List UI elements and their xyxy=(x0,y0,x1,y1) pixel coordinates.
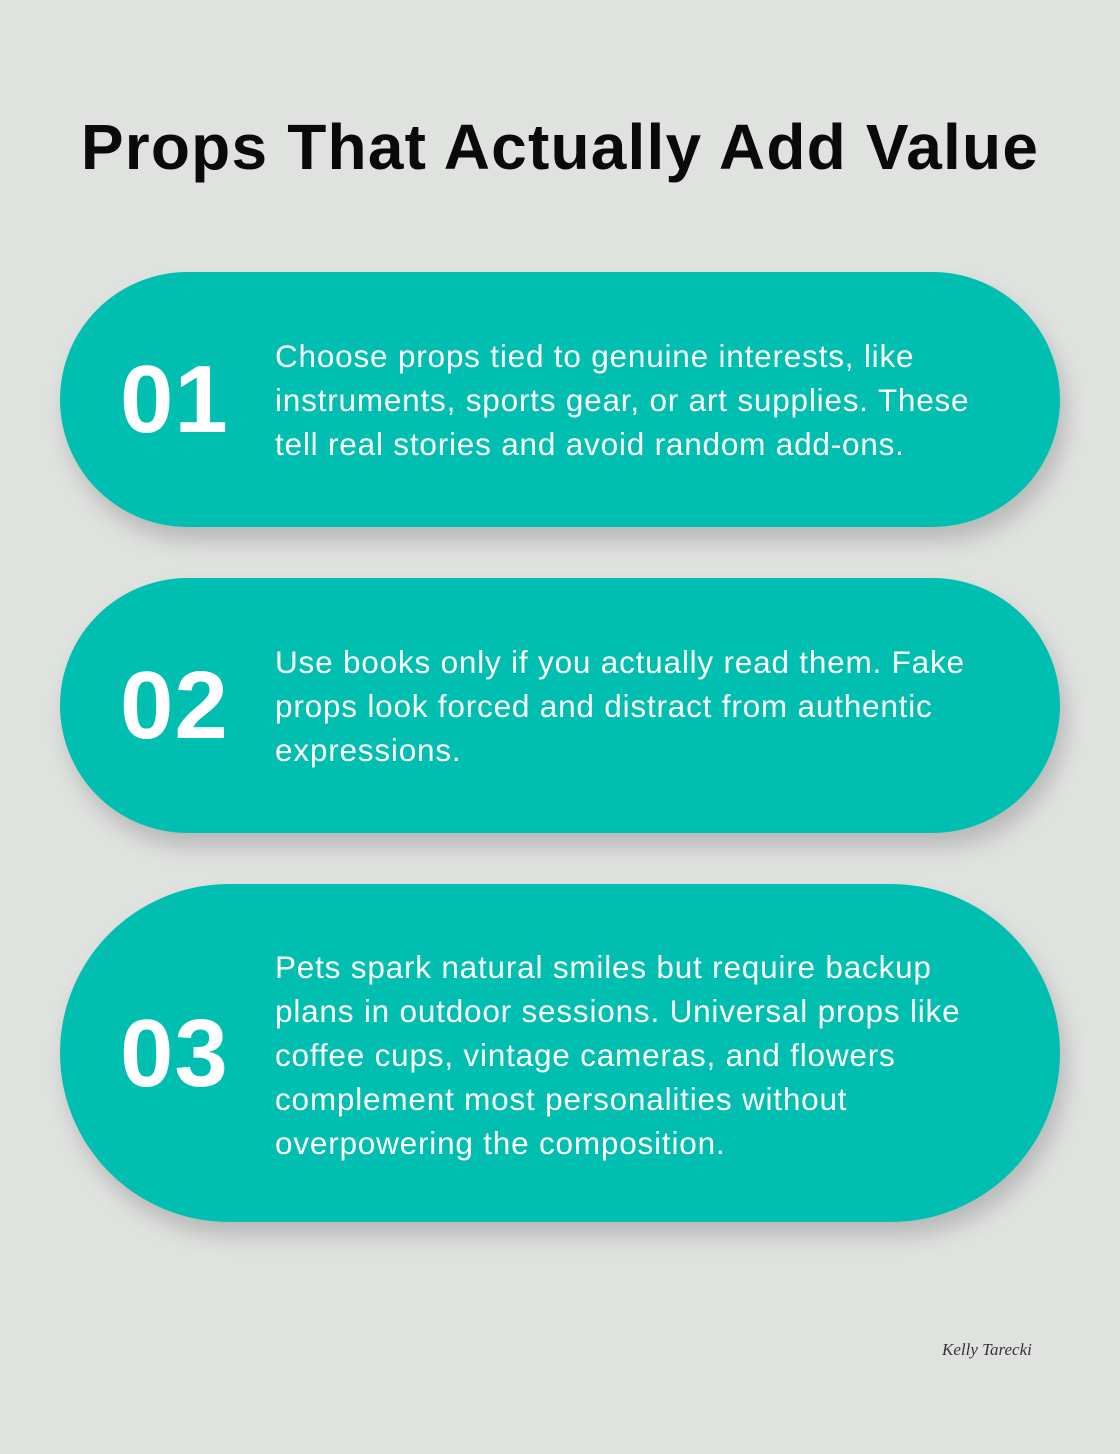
text 02: expressions. xyxy=(275,732,461,768)
title: Props That Actually Add Value xyxy=(81,111,1039,183)
text 03 xyxy=(275,949,960,1161)
text 03: Pets spark natural smiles but require backup xyxy=(275,949,932,985)
text 02: Use books only if you actually read them. Fake xyxy=(275,644,965,680)
logo signature: Kelly Tarecki xyxy=(942,1340,1032,1359)
text 01: tell real stories and avoid random add-ons. xyxy=(275,426,905,462)
text 03: overpowering the composition. xyxy=(275,1125,725,1161)
panel: 03 xyxy=(60,884,1060,1222)
text 01: instruments, sports gear, or art supplies. These xyxy=(275,382,969,418)
text 03: coffee cups, vintage cameras, and flowers xyxy=(275,1037,896,1073)
text 03: complement most personalities without xyxy=(275,1081,847,1117)
text 03: plans in outdoor sessions. Universal props like xyxy=(275,993,960,1029)
number 02: 02 xyxy=(120,652,229,759)
text 02 xyxy=(275,644,965,768)
number 01: 01 xyxy=(120,346,229,453)
text 02: props look forced and distract from authentic xyxy=(275,688,933,724)
text 01: Choose props tied to genuine interests, like xyxy=(275,338,914,374)
panel: 01 xyxy=(60,272,1060,527)
text 01 xyxy=(275,338,969,462)
number 03: 03 xyxy=(120,1000,229,1107)
panel: 02 xyxy=(60,578,1060,833)
